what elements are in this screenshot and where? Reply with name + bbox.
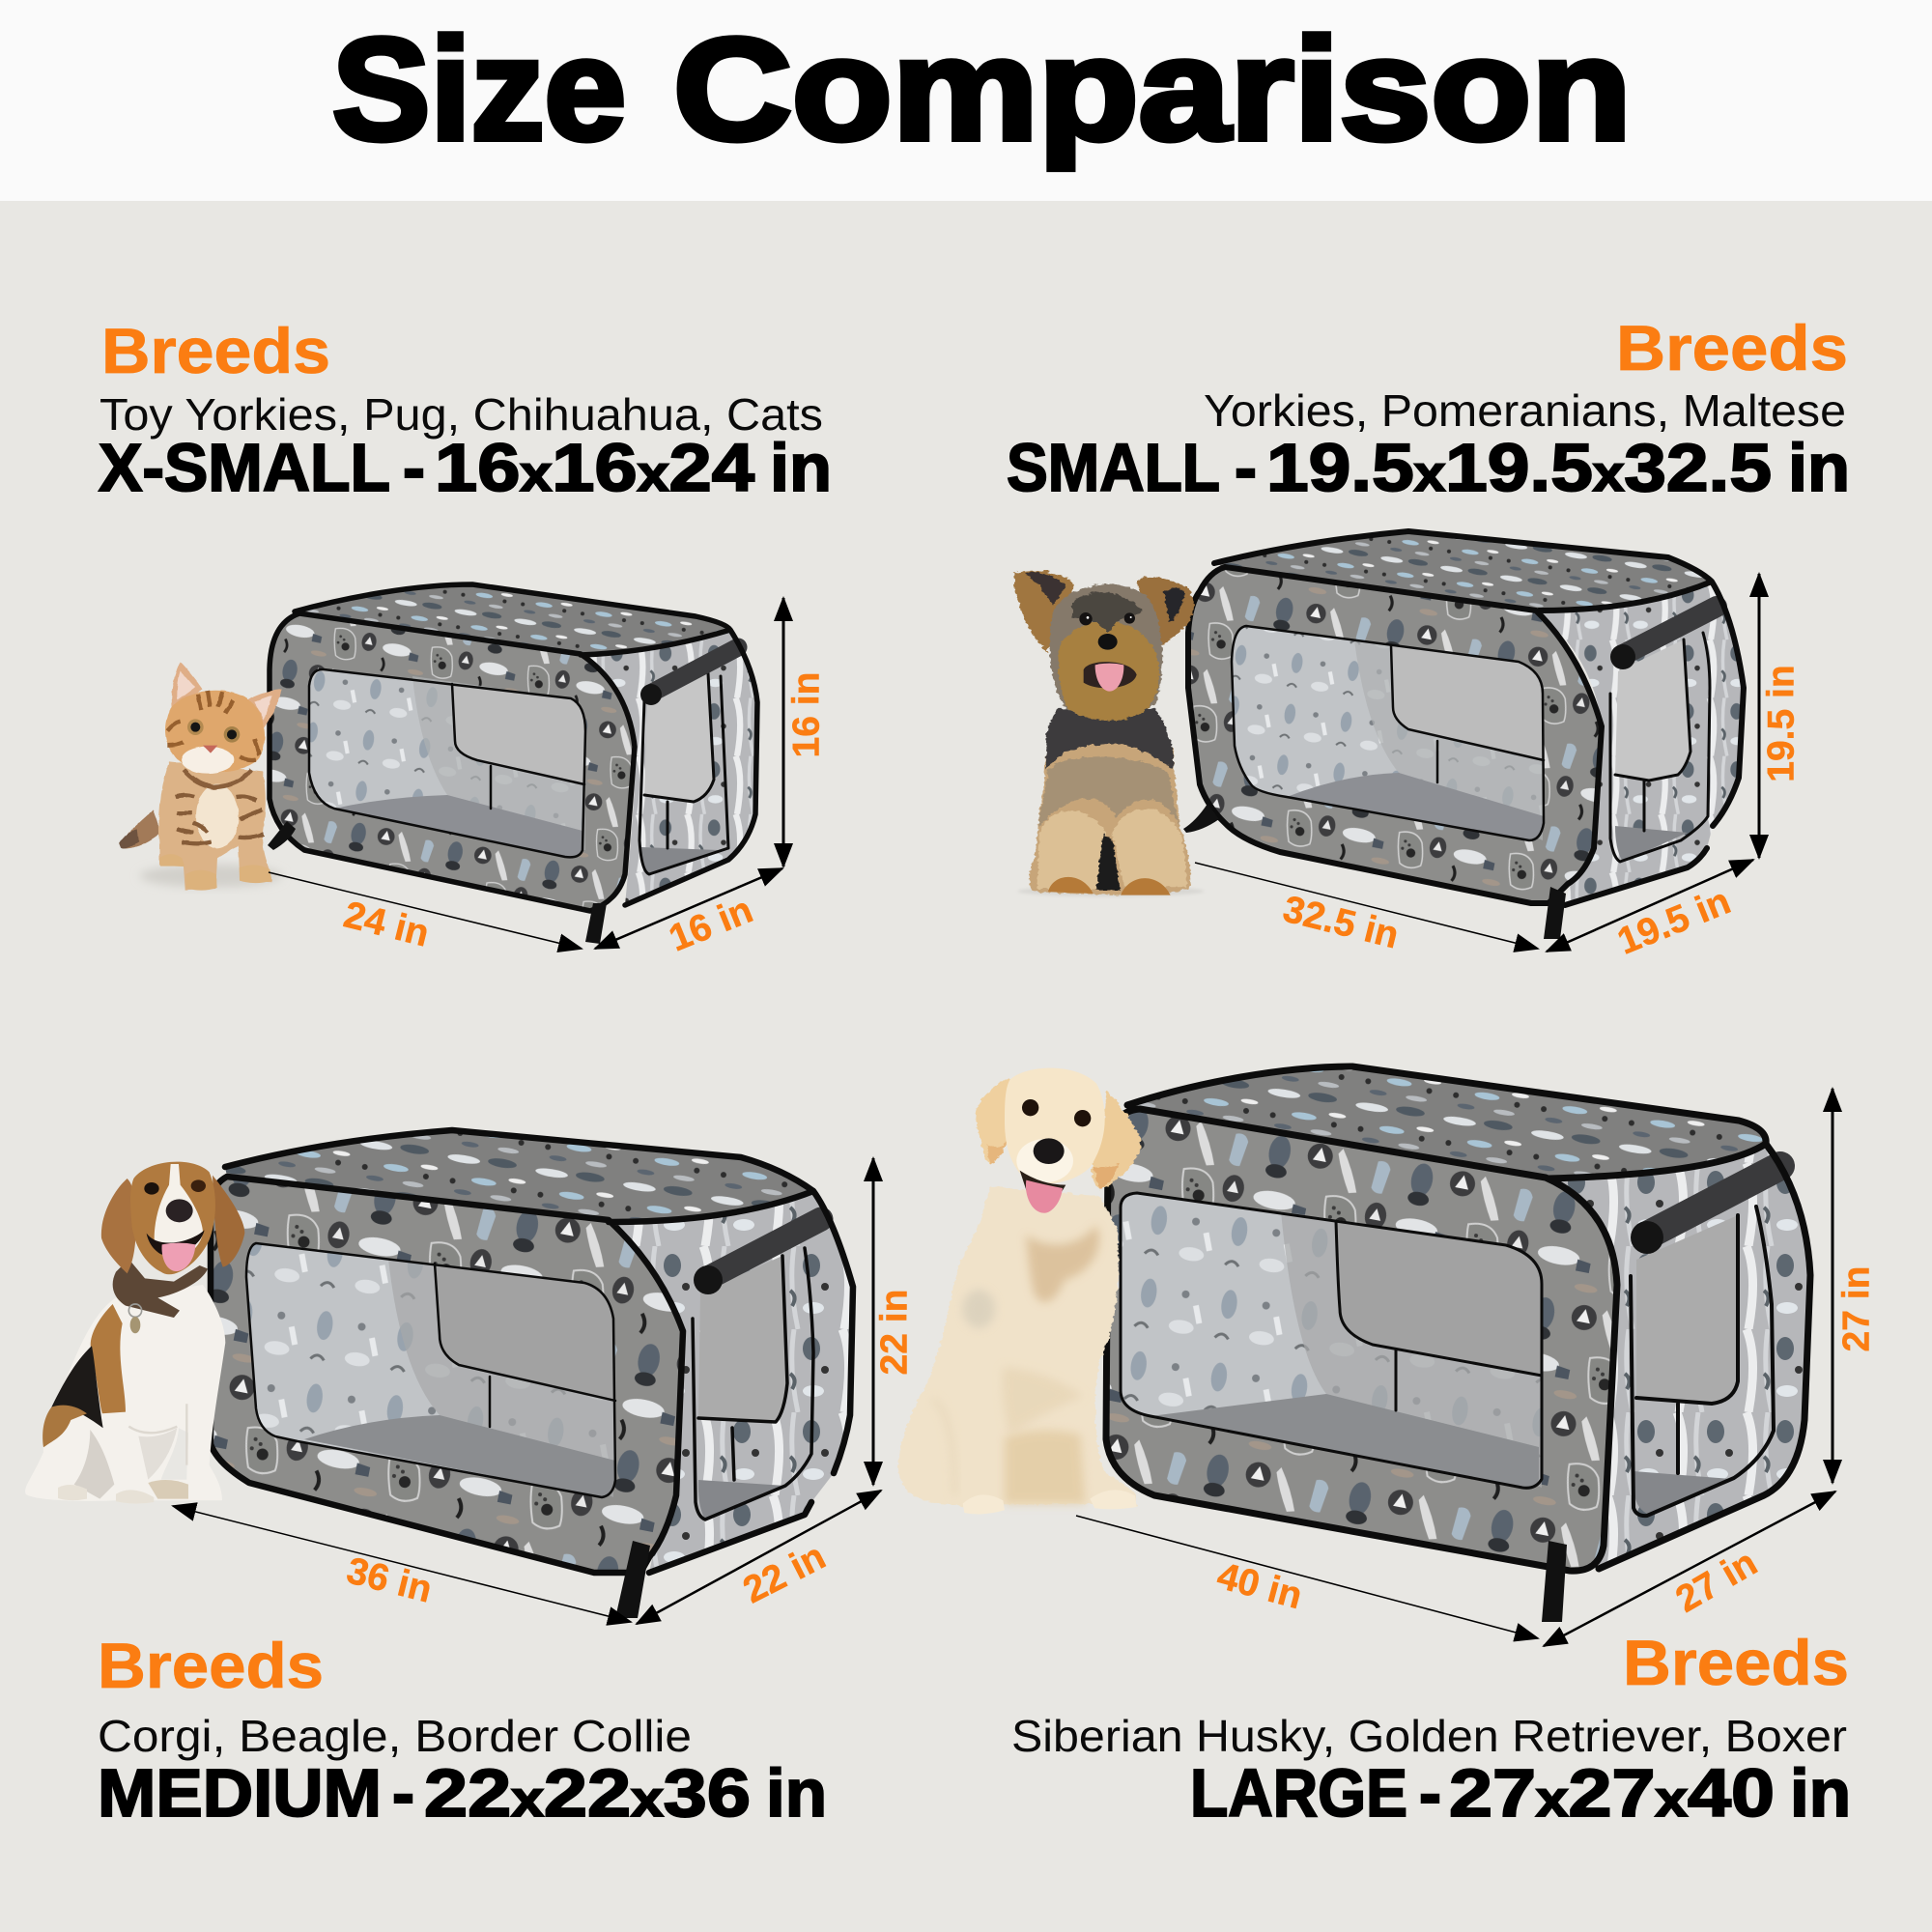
golden body [898, 1186, 1137, 1507]
width arrow [269, 872, 582, 949]
rolled door [640, 647, 738, 705]
dimension arrows: large [1076, 1089, 1878, 1646]
cat tail [119, 810, 161, 849]
tent front opening [1121, 1193, 1542, 1488]
header band [0, 0, 1932, 201]
tent straps [615, 1541, 650, 1618]
tent front opening [1232, 626, 1544, 840]
height label: 27 in [1835, 1266, 1878, 1351]
panel: medium text [98, 1630, 827, 1831]
tent: large [1106, 1066, 1810, 1622]
cat [119, 662, 282, 891]
tent top panel [1214, 531, 1712, 611]
beagle nose [166, 1199, 193, 1222]
tent top panel [1127, 1066, 1766, 1179]
depth label: 22 in [737, 1536, 832, 1611]
size line medium: 22x22x36 [424, 1755, 751, 1831]
beagle paws [58, 1485, 154, 1503]
tent side panel [1536, 585, 1744, 905]
beagle shaded haunch [74, 1430, 114, 1499]
width label: 24 in [340, 894, 433, 955]
tent side opening [639, 673, 728, 874]
tent: medium [211, 1130, 853, 1618]
height arrow [871, 1158, 875, 1485]
golden haunch [932, 1399, 954, 1495]
tent: small [1183, 531, 1744, 939]
size line large: in [1790, 1755, 1851, 1831]
tent side opening [1610, 633, 1710, 862]
rolled door [1610, 607, 1717, 669]
yorkie eyes [1079, 612, 1135, 625]
beagle body [25, 1285, 225, 1501]
tent side panel [581, 633, 757, 905]
yorkie right ear [1137, 577, 1193, 647]
tent front panel [270, 613, 635, 911]
size line small: SMALL [1007, 430, 1220, 505]
beagle haunch [43, 1406, 87, 1447]
size line large: - [1419, 1755, 1441, 1831]
beagle collar [113, 1259, 208, 1318]
size line medium: - [392, 1755, 414, 1831]
beagle tag [128, 1304, 142, 1333]
cat head [165, 691, 265, 772]
tent front panel [1106, 1109, 1617, 1571]
tent straps [1542, 1541, 1567, 1622]
depth label: 27 in [1669, 1542, 1764, 1621]
breeds list x-small: Toy Yorkies, Pug, Chihuahua, Cats [99, 389, 823, 440]
cat paws [159, 854, 271, 891]
cat head stripes [167, 691, 259, 760]
tent: x-small [268, 584, 757, 944]
tent top panel [295, 584, 730, 655]
panel: x-small text [99, 315, 832, 505]
size line medium [98, 1755, 827, 1831]
yorkie shadow [1017, 886, 1205, 896]
tent side opening [693, 1248, 813, 1520]
size line small: 19.5 x19.5 x32.5 [1266, 430, 1772, 505]
tent black piping [270, 584, 757, 911]
tent straps [268, 821, 607, 944]
heading: breeds x-small: Breeds [101, 315, 330, 386]
golden left ear [976, 1077, 1011, 1164]
size line small: in [1788, 430, 1850, 505]
size line x-small [99, 430, 832, 505]
beagle saddle [91, 1304, 126, 1413]
panel: large text [1011, 1627, 1851, 1831]
tent side panel [609, 1193, 853, 1573]
cat nose [203, 746, 217, 753]
size line large [1190, 1755, 1851, 1831]
rolled door [1631, 1166, 1780, 1254]
tent top panel [225, 1130, 813, 1222]
width label: 32.5 in [1279, 888, 1403, 957]
golden paws [963, 1490, 1137, 1514]
beagle head [130, 1162, 215, 1274]
yorkie forehead [1072, 592, 1143, 633]
golden muzzle [1016, 1139, 1073, 1182]
heading: breeds small: Breeds [1616, 312, 1848, 384]
width label: 40 in [1213, 1555, 1306, 1617]
size line x-small: X-SMALL [99, 430, 390, 505]
beagle hind paw [148, 1480, 188, 1499]
tent black piping [1188, 531, 1744, 905]
golden shoulder shading [963, 1290, 995, 1328]
beagle right ear [213, 1176, 244, 1267]
golden mouth [1020, 1171, 1065, 1193]
depth arrow [637, 1491, 881, 1624]
beagle [25, 1162, 244, 1503]
beagle left ear [101, 1179, 136, 1273]
golden nose [1034, 1138, 1065, 1164]
tent front opening [246, 1243, 615, 1497]
width label: 36 in [343, 1549, 436, 1611]
dimension arrows: small [1195, 574, 1803, 963]
dimension arrows: medium [173, 1158, 916, 1624]
panel: small text [1007, 312, 1850, 505]
yorkie body [1029, 708, 1191, 895]
beagle front leg shading [128, 1404, 186, 1465]
beagle eyes [144, 1179, 206, 1195]
depth arrow [595, 868, 782, 949]
cat ears [172, 662, 282, 731]
cat shadow [140, 865, 282, 888]
depth arrow [1544, 1492, 1835, 1646]
golden chest fur [1026, 1225, 1099, 1302]
height arrow [782, 598, 784, 867]
tent side opening [1631, 1207, 1774, 1516]
size line x-small: - [403, 430, 425, 505]
cat stripes [176, 795, 264, 843]
height arrow [1758, 574, 1760, 858]
size line large: LARGE [1190, 1755, 1407, 1831]
height arrow [1832, 1089, 1833, 1483]
yorkie [1013, 571, 1205, 896]
beagle tongue [162, 1243, 195, 1271]
height label: 22 in [873, 1290, 916, 1375]
golden eyes [1022, 1099, 1091, 1126]
depth arrow [1547, 860, 1753, 952]
yorkie left ear [1013, 571, 1074, 652]
golden head [1005, 1068, 1105, 1183]
beagle black back [51, 1346, 103, 1428]
size line x-small: 16x16x24 [435, 430, 754, 505]
tent front opening [309, 669, 585, 857]
depth label: 16 in [664, 889, 758, 960]
breeds list large: Siberian Husky, Golden Retriever, Boxer [1011, 1711, 1847, 1761]
golden between legs [1005, 1431, 1085, 1504]
yorkie shaggy chest [1038, 756, 1180, 828]
golden right ear [1093, 1090, 1142, 1190]
size line small: - [1235, 430, 1257, 505]
cat eyes [187, 719, 240, 743]
golden lower chest [1002, 1367, 1084, 1435]
width arrow [1076, 1516, 1538, 1638]
yorkie head [1050, 584, 1162, 720]
breeds list small: Yorkies, Pomeranians, Maltese [1204, 385, 1846, 436]
size line small [1007, 430, 1850, 505]
beagle gap between legs [161, 1428, 188, 1480]
yorkie legs [1037, 809, 1186, 889]
height label: 19.5 in [1760, 665, 1803, 782]
yorkie mouth [1084, 662, 1137, 688]
title [332, 8, 1632, 170]
golden retriever [898, 1068, 1142, 1514]
breeds list medium: Corgi, Beagle, Border Collie [98, 1711, 692, 1761]
golden tongue [1026, 1180, 1063, 1213]
yorkie paws [1048, 877, 1171, 895]
title: Size [332, 8, 626, 170]
heading: breeds medium: Breeds [98, 1630, 324, 1701]
tent side panel [1546, 1144, 1810, 1569]
tent black piping [211, 1130, 853, 1573]
size line medium: in [766, 1755, 827, 1831]
beagle mouth [147, 1230, 205, 1256]
heading: breeds large: Breeds [1623, 1627, 1849, 1698]
tent straps [1183, 804, 1566, 939]
yorkie face [1058, 621, 1159, 721]
width arrow [173, 1506, 631, 1622]
tent front panel [211, 1177, 683, 1573]
cat muzzle [182, 747, 234, 774]
yorkie tongue [1095, 664, 1123, 692]
dimension arrows: x-small [269, 598, 827, 960]
yorkie dark chest band [1046, 708, 1174, 770]
cat body [158, 761, 272, 891]
depth label: 19.5 in [1612, 880, 1736, 963]
size line x-small: in [770, 430, 832, 505]
rolled door [694, 1219, 821, 1294]
size line medium: MEDIUM [98, 1755, 382, 1831]
cat chest [196, 784, 239, 848]
yorkie nose [1098, 634, 1118, 650]
size line large: 27x27x40 [1449, 1755, 1775, 1831]
tent front panel [1188, 567, 1602, 903]
beagle blaze [155, 1164, 203, 1259]
title: Comparison [673, 8, 1632, 170]
height label: 16 in [786, 672, 827, 757]
width arrow [1195, 863, 1538, 949]
yorkie leg gap [1096, 834, 1121, 891]
tent black piping [1106, 1066, 1810, 1571]
